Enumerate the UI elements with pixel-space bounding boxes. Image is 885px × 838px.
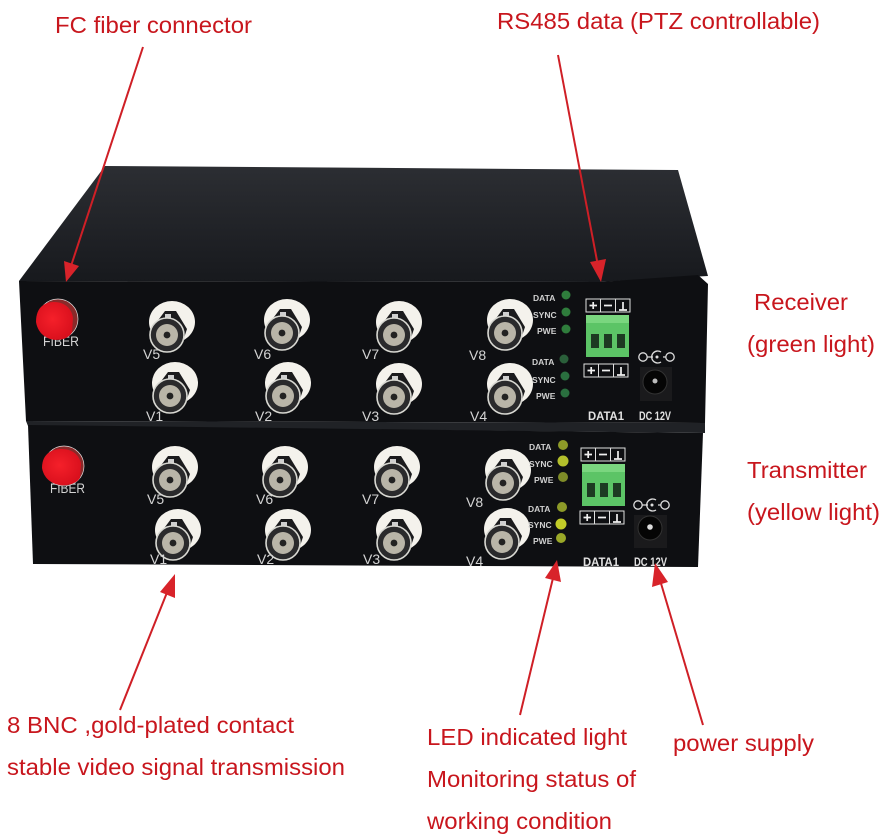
BNC connectors: receiver: V3 — [362, 408, 379, 424]
status LEDs: yellow: PWE — [534, 475, 554, 485]
power jack: receiver — [639, 351, 674, 423]
label: LED description — [426, 724, 636, 834]
panel: receiver unit — [19, 166, 708, 424]
BNC connectors: transmitter: V7 — [362, 491, 379, 507]
BNC connectors: transmitter: V6 — [256, 491, 273, 507]
label: Transmitter: (yellow light) — [747, 499, 880, 525]
status LEDs: green: PWE — [536, 391, 556, 401]
fiber connector: transmitter — [42, 446, 85, 496]
fiber connector: transmitter: FIBER — [50, 480, 85, 496]
BNC connectors: receiver: V1 — [146, 408, 163, 424]
BNC connectors: receiver: V7 — [362, 346, 379, 362]
BNC connectors: receiver: V8 — [469, 347, 486, 363]
status LEDs: green: DATA — [532, 357, 554, 367]
BNC connectors: receiver: V2 — [255, 408, 272, 424]
arrow: to fiber connector — [64, 47, 143, 282]
BNC connectors: transmitter: V3 — [363, 551, 380, 567]
data terminal: receiver: DATA1 — [588, 409, 624, 423]
BNC connectors: transmitter: V2 — [257, 551, 274, 567]
status LEDs: yellow: DATA — [529, 442, 551, 452]
status LEDs: yellow: DATA — [528, 504, 550, 514]
arrow: to RS485 terminal — [558, 55, 606, 282]
arrow: to power input — [652, 563, 703, 725]
label: BNC description: stable video signal transmission — [7, 754, 345, 780]
arrow: to BNC connector — [120, 574, 175, 710]
arrow: to LED lights — [520, 560, 561, 715]
BNC connectors: receiver — [143, 299, 533, 424]
label: Transmitter — [747, 457, 880, 525]
status LEDs: yellow: SYNC — [529, 459, 553, 469]
label: LED description: working condition — [426, 808, 612, 834]
data terminal: receiver — [584, 299, 630, 423]
label: LED description: LED indicated light — [427, 724, 627, 750]
label: Receiver: Receiver — [754, 289, 848, 315]
power jack: receiver: DC 12V — [639, 409, 671, 423]
label: Transmitter: Transmitter — [747, 457, 867, 483]
fiber connector: receiver — [36, 299, 79, 349]
label: FC fiber connector: FC fiber connector — [55, 12, 252, 38]
status LEDs: yellow: SYNC — [528, 520, 552, 530]
BNC connectors: receiver: V6 — [254, 346, 271, 362]
label: BNC description — [7, 712, 345, 780]
receiver front face — [19, 275, 708, 423]
label: Receiver — [747, 289, 875, 357]
status LEDs: green: DATA — [533, 293, 555, 303]
BNC connectors: receiver: V4 — [470, 408, 487, 424]
label: BNC description: 8 BNC ,gold-plated contact — [7, 712, 294, 738]
panel: transmitter unit — [26, 421, 705, 569]
status LEDs: green: PWE — [537, 326, 557, 336]
power jack: transmitter: DC 12V — [634, 555, 667, 569]
fiber connector: receiver: FIBER — [43, 333, 79, 349]
BNC connectors: transmitter: V4 — [466, 553, 483, 569]
status LEDs: yellow — [528, 440, 568, 546]
label: Receiver: (green light) — [747, 331, 875, 357]
power jack: transmitter — [634, 499, 669, 569]
status LEDs: green: SYNC — [533, 310, 557, 320]
BNC connectors: transmitter — [147, 446, 531, 569]
BNC connectors: receiver: V5 — [143, 346, 160, 362]
transmitter front face — [28, 425, 703, 567]
data terminal: transmitter: DATA1 — [583, 555, 619, 569]
data terminal: transmitter — [580, 448, 625, 569]
receiver top face — [19, 166, 708, 282]
status LEDs: green — [532, 290, 570, 401]
BNC connectors: transmitter: V8 — [466, 494, 483, 510]
label: LED description: Monitoring status of — [427, 766, 636, 792]
label: power supply: power supply — [673, 730, 814, 756]
BNC connectors: transmitter: V5 — [147, 491, 164, 507]
status LEDs: green: SYNC — [532, 375, 556, 385]
status LEDs: yellow: PWE — [533, 536, 553, 546]
label: RS485 data: RS485 data (PTZ controllable) — [497, 8, 820, 34]
BNC connectors: transmitter: V1 — [150, 551, 167, 567]
